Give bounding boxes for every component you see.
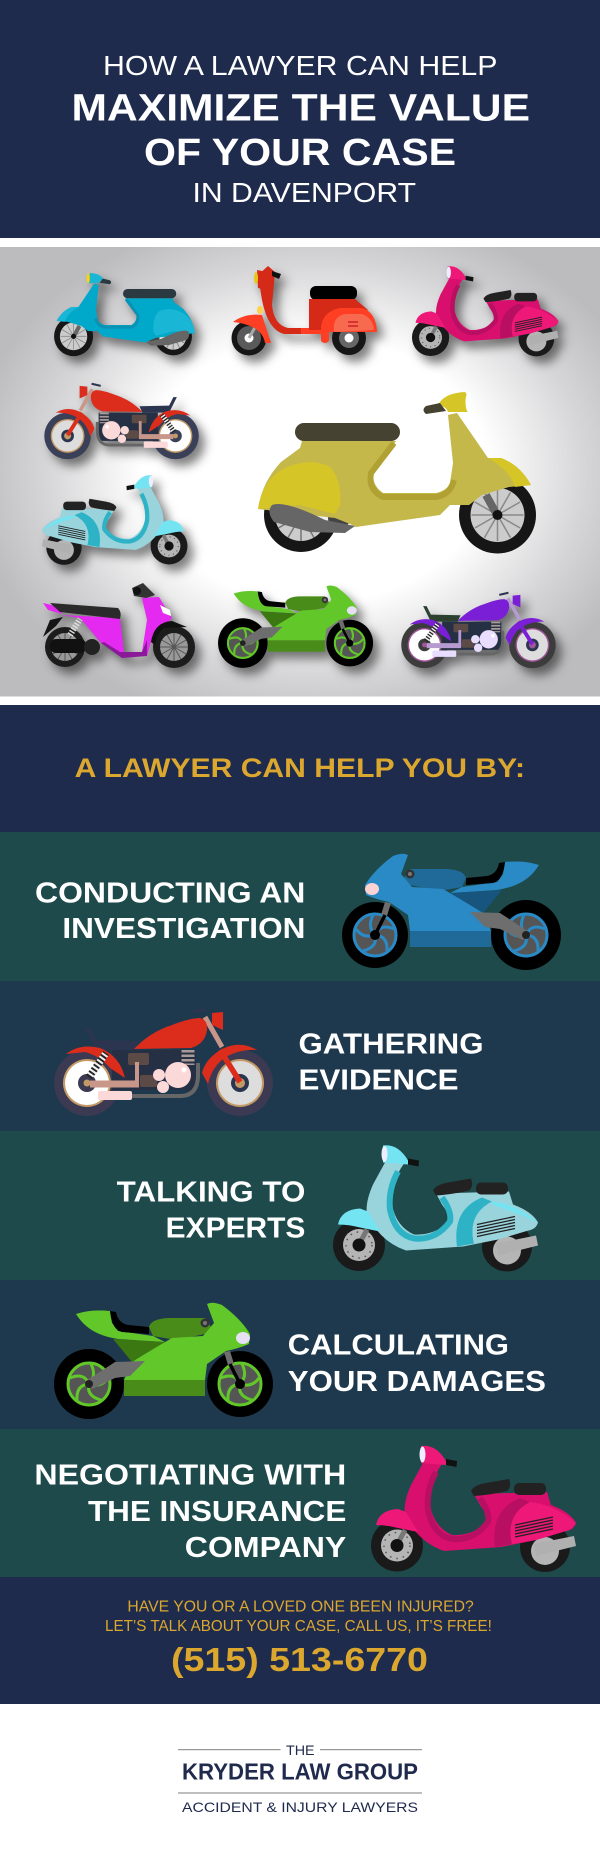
icon: blue scooter xyxy=(54,273,195,356)
logo: the kryder law group: ACCIDENT & INJURY LAWYERS xyxy=(182,1799,418,1815)
icon: red motorcycle xyxy=(44,384,199,459)
icon: green sport bike large xyxy=(54,1303,273,1419)
icon: pink scooter large xyxy=(371,1446,576,1572)
panel: gathering evidence xyxy=(0,981,600,1131)
title xyxy=(72,50,530,208)
title: OF YOUR CASE xyxy=(144,132,456,174)
icon: red scooter xyxy=(232,266,377,356)
logo: the kryder law group: KRYDER LAW GROUP xyxy=(182,1758,418,1784)
panel: calculating your damages xyxy=(0,1280,600,1429)
phone number: (515) 513-6770 xyxy=(171,1641,428,1678)
text: talking to experts: EXPERTS xyxy=(166,1212,305,1244)
header panel xyxy=(0,0,600,238)
text: talking to experts xyxy=(117,1177,305,1244)
icon: magenta scooter xyxy=(43,583,195,668)
text: call to action: LET’S TALK ABOUT YOUR CASE, CALL US, IT’S FREE! xyxy=(105,1618,492,1635)
icon: mint scooter xyxy=(42,475,187,565)
icon: mint scooter large xyxy=(333,1145,538,1272)
text: gathering evidence: GATHERING xyxy=(298,1028,484,1060)
icon: green sport bike xyxy=(218,586,373,668)
icon: blue sport bike xyxy=(342,854,561,970)
title: HOW A LAWYER CAN HELP xyxy=(103,50,498,81)
text: gathering evidence xyxy=(298,1028,484,1096)
text: calculating your damages: CALCULATING xyxy=(288,1330,509,1362)
text: talking to experts: TALKING TO xyxy=(117,1177,305,1209)
logo: the kryder law group xyxy=(178,1742,422,1815)
title: MAXIMIZE THE VALUE xyxy=(72,88,530,130)
heading: a lawyer can help you by: A LAWYER CAN HELP YOU BY: xyxy=(75,753,525,783)
title: IN DAVENPORT xyxy=(192,177,416,208)
panel: conducting an investigation xyxy=(0,832,600,981)
text: calculating your damages xyxy=(288,1330,546,1398)
text: conducting an investigation: CONDUCTING AN xyxy=(35,877,305,909)
text: call to action: HAVE YOU OR A LOVED ONE BEEN INJURED? xyxy=(127,1598,474,1616)
panel: call to action xyxy=(0,1577,600,1704)
panel: vehicle gallery xyxy=(0,247,600,696)
panel: subheading band xyxy=(0,705,600,832)
icon: pink scooter xyxy=(412,266,559,356)
panel: talking to experts xyxy=(0,1131,600,1280)
panel: negotiating with the insurance company xyxy=(0,1429,600,1577)
text: negotiating with the insurance company: COMPANY xyxy=(185,1532,346,1564)
text: negotiating with the insurance company xyxy=(34,1459,346,1564)
text: conducting an investigation xyxy=(35,877,305,945)
text: call to action xyxy=(105,1598,492,1635)
text: gathering evidence: EVIDENCE xyxy=(298,1064,458,1096)
text: negotiating with the insurance company: NEGOTIATING WITH xyxy=(34,1459,346,1491)
logo: the kryder law group: THE xyxy=(286,1742,315,1758)
text: conducting an investigation: INVESTIGATION xyxy=(62,913,305,945)
icon: purple motorcycle xyxy=(401,593,556,668)
icon: red motorcycle large xyxy=(54,1009,273,1116)
text: negotiating with the insurance company: THE INSURANCE xyxy=(88,1496,346,1528)
text: calculating your damages: YOUR DAMAGES xyxy=(288,1366,546,1398)
icon: large yellow scooter xyxy=(258,392,536,554)
